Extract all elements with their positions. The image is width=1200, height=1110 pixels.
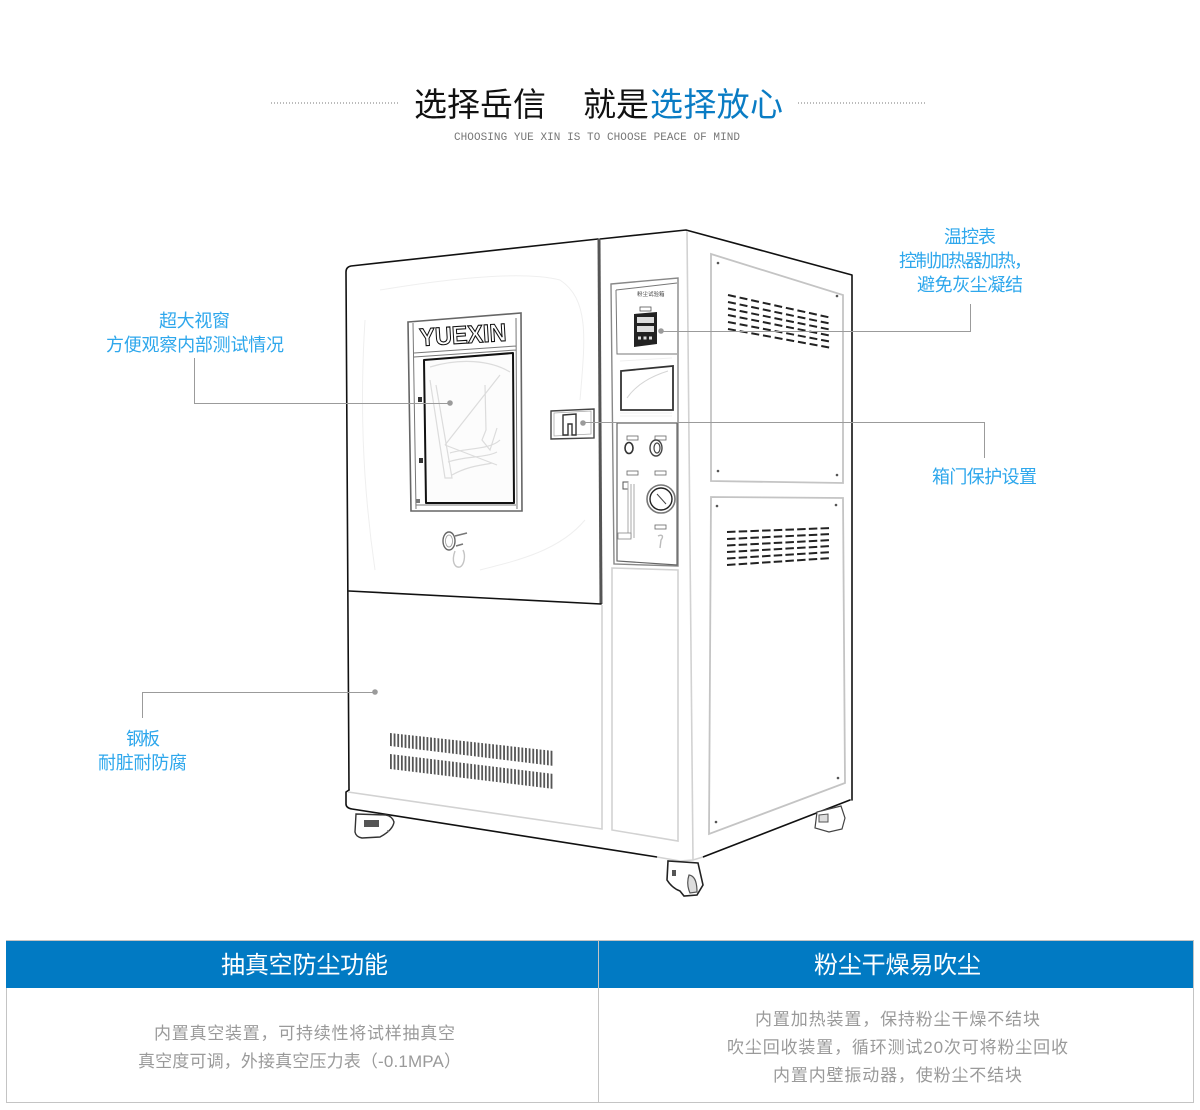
control panel column <box>611 278 678 841</box>
temperature controller <box>634 307 657 347</box>
upper panel screws <box>717 262 838 476</box>
cabinet dark edges <box>346 230 852 861</box>
small label plates <box>627 436 666 529</box>
pressure gauge <box>647 485 675 513</box>
heading: 粉尘干燥易吹尘 <box>814 952 981 979</box>
title: black part: 选择岳信 <box>414 86 546 123</box>
heading: 抽真空防尘功能 <box>221 952 388 979</box>
callout text: 温控表 <box>944 227 996 247</box>
knob left <box>625 442 633 454</box>
left caster <box>355 814 394 838</box>
callout text: 钢板 <box>126 729 160 749</box>
side upper panel <box>711 254 843 483</box>
leader line <box>661 304 970 332</box>
callout text: 超大视窗 <box>159 311 230 331</box>
body text: 内置加热装置，保持粉尘干燥不结块 <box>755 1010 1040 1029</box>
lower panel vents <box>727 528 832 565</box>
body text: 吹尘回收装置，循环测试20次可将粉尘回收 <box>727 1038 1068 1057</box>
callout: steel plate <box>98 689 378 773</box>
front caster <box>667 861 703 896</box>
touch screen <box>620 358 673 416</box>
header bar <box>599 941 1193 988</box>
door latch <box>551 409 594 439</box>
upper panel vents <box>728 295 832 348</box>
body text: 真空度可调，外接真空压力表（-0.1MPA） <box>138 1052 461 1071</box>
window glass <box>424 353 514 503</box>
lower door vent grille <box>390 733 554 789</box>
callout: temperature controller: 避免灰尘凝结 <box>917 275 1023 295</box>
leader line <box>142 692 375 718</box>
panel: dry powder blowing <box>599 941 1193 1085</box>
column outlines <box>612 568 678 841</box>
title: blue part: 选择放心 <box>650 86 783 123</box>
callout: temperature controller: 控制加热器加热， <box>899 251 1032 271</box>
title right dotted rule <box>798 102 925 104</box>
window frame <box>408 313 522 511</box>
frame hinge marks <box>416 397 423 503</box>
door bottom edge <box>349 591 601 604</box>
lower panel screws <box>715 504 839 823</box>
YUEXIN logo: YUEXIN <box>419 319 507 352</box>
callout: steel plate: 耐脏耐防腐 <box>98 753 187 773</box>
body text: 内置内壁振动器，使粉尘不结块 <box>773 1065 1022 1085</box>
callout: large viewing window: 方便观察内部测试情况 <box>106 335 284 355</box>
title block <box>271 86 925 144</box>
panel title: 粉尘试验箱 <box>637 290 665 298</box>
subtitle: CHOOSING YUE XIN IS TO CHOOSE PEACE OF MIND <box>454 132 740 144</box>
door hinge post <box>599 239 601 604</box>
callout: large viewing window <box>106 311 453 406</box>
column divider <box>598 941 600 1102</box>
rear caster <box>815 806 845 832</box>
callout text: 箱门保护设置 <box>932 467 1037 487</box>
panel: vacuum dust proofing <box>6 941 598 1071</box>
test chamber illustration <box>346 230 852 896</box>
leader dot <box>372 689 378 695</box>
glass reflection sketch <box>430 361 510 478</box>
viewing window <box>408 313 522 511</box>
door handle <box>443 532 467 567</box>
feature table <box>6 940 1194 1102</box>
flow meter <box>618 482 634 539</box>
cabinet body outline <box>346 230 852 861</box>
callout: door protection <box>580 420 1037 487</box>
knob right <box>650 440 662 456</box>
leader dot <box>447 400 453 406</box>
side lower panel <box>709 497 845 834</box>
header bar <box>6 941 598 988</box>
leader dot <box>658 328 664 334</box>
body text <box>138 1024 461 1071</box>
door faint contours <box>362 276 585 570</box>
title left dotted rule <box>271 102 398 104</box>
table frame <box>6 940 1194 1102</box>
title: black part two: 就是 <box>583 86 649 123</box>
body text: 内置真空装置，可持续性将试样抽真空 <box>154 1024 455 1043</box>
body text <box>727 1010 1068 1085</box>
leader line <box>583 422 984 458</box>
callout: temperature controller <box>658 227 1032 334</box>
lower controls plate <box>617 423 677 565</box>
small valve <box>658 535 662 548</box>
leader line <box>194 358 449 404</box>
leader dot <box>580 420 586 426</box>
